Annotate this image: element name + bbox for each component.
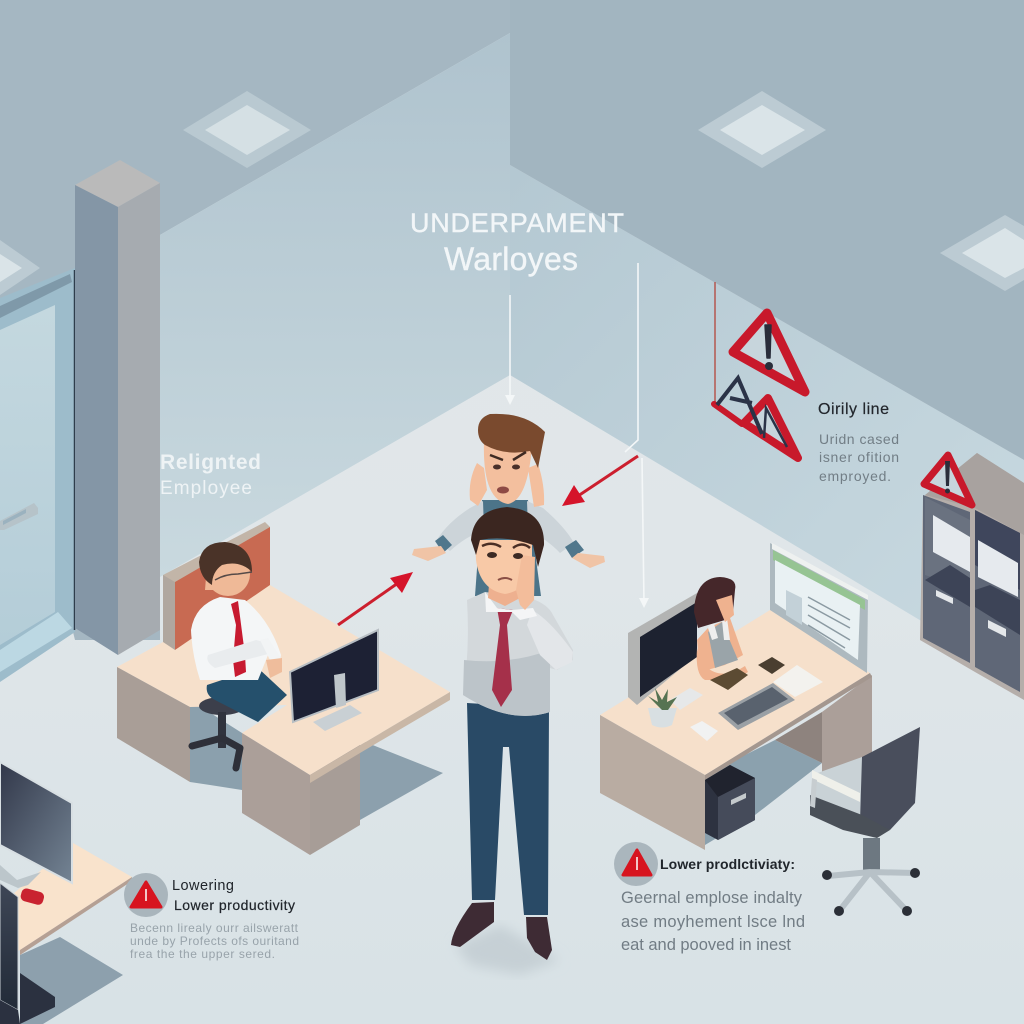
arrow: white connectors xyxy=(625,263,649,608)
central employee xyxy=(451,507,573,975)
text: oirily line: Oirily line xyxy=(818,401,889,418)
storage cabinet xyxy=(920,453,1024,700)
icon: warning badge xyxy=(614,842,658,886)
heading: UNDERPAMENT xyxy=(410,208,624,238)
pillar xyxy=(75,160,160,655)
callout: lowering productivity: unde by Profects ofs ouritand xyxy=(130,934,299,948)
green screen xyxy=(770,543,868,673)
callout: lower prodlctiviaty: Lower prodlctiviaty: xyxy=(660,856,795,872)
ceiling lights xyxy=(0,91,1024,295)
right desk xyxy=(600,610,872,850)
desk items xyxy=(648,657,823,741)
callout: lowering productivity: Becenn lirealy ourr ailsweratt xyxy=(130,921,299,935)
label: relignted employee: Employee xyxy=(160,478,252,499)
heading: Warloyes xyxy=(444,241,578,277)
callout: lower prodlctiviaty xyxy=(614,842,805,954)
text: oirily line xyxy=(818,401,899,484)
callout: lower prodlctiviaty: eat and pooved in inest xyxy=(621,936,791,954)
monitor left desk xyxy=(290,630,378,731)
office chair xyxy=(810,727,920,916)
back employee xyxy=(412,414,605,596)
text: oirily line: emproyed. xyxy=(819,468,891,484)
text: oirily line: isner ofition xyxy=(819,449,899,465)
left desk xyxy=(117,522,450,855)
callout: lower prodlctiviaty: ase moyhement lsce lnd xyxy=(621,913,805,931)
monitor right desk xyxy=(628,593,697,705)
label: relignted employee xyxy=(160,451,261,499)
label: relignted employee: Relignted xyxy=(160,451,261,474)
warning sign: cabinet xyxy=(924,455,972,505)
seated employee right xyxy=(694,577,748,680)
callout: lowering productivity xyxy=(124,873,299,961)
text: oirily line: Uridn cased xyxy=(819,431,899,447)
arrow: red from desk xyxy=(338,572,413,625)
icon: warning badge xyxy=(124,873,168,917)
warning signs cluster xyxy=(714,282,805,458)
callout: lowering productivity: frea the the upper sered. xyxy=(130,947,275,961)
arrow: heading to employee xyxy=(505,295,515,405)
heading xyxy=(410,208,624,277)
callout: lowering productivity: Lower productivity xyxy=(174,897,295,913)
callout: lower prodlctiviaty: Geernal emplose indalty xyxy=(621,889,803,907)
glass door xyxy=(0,268,75,682)
bottom-left monitor and desk xyxy=(0,762,132,1024)
seated employee left xyxy=(191,542,287,768)
arrow: red to top employee xyxy=(562,456,638,506)
callout: lowering productivity: Lowering xyxy=(172,878,234,894)
